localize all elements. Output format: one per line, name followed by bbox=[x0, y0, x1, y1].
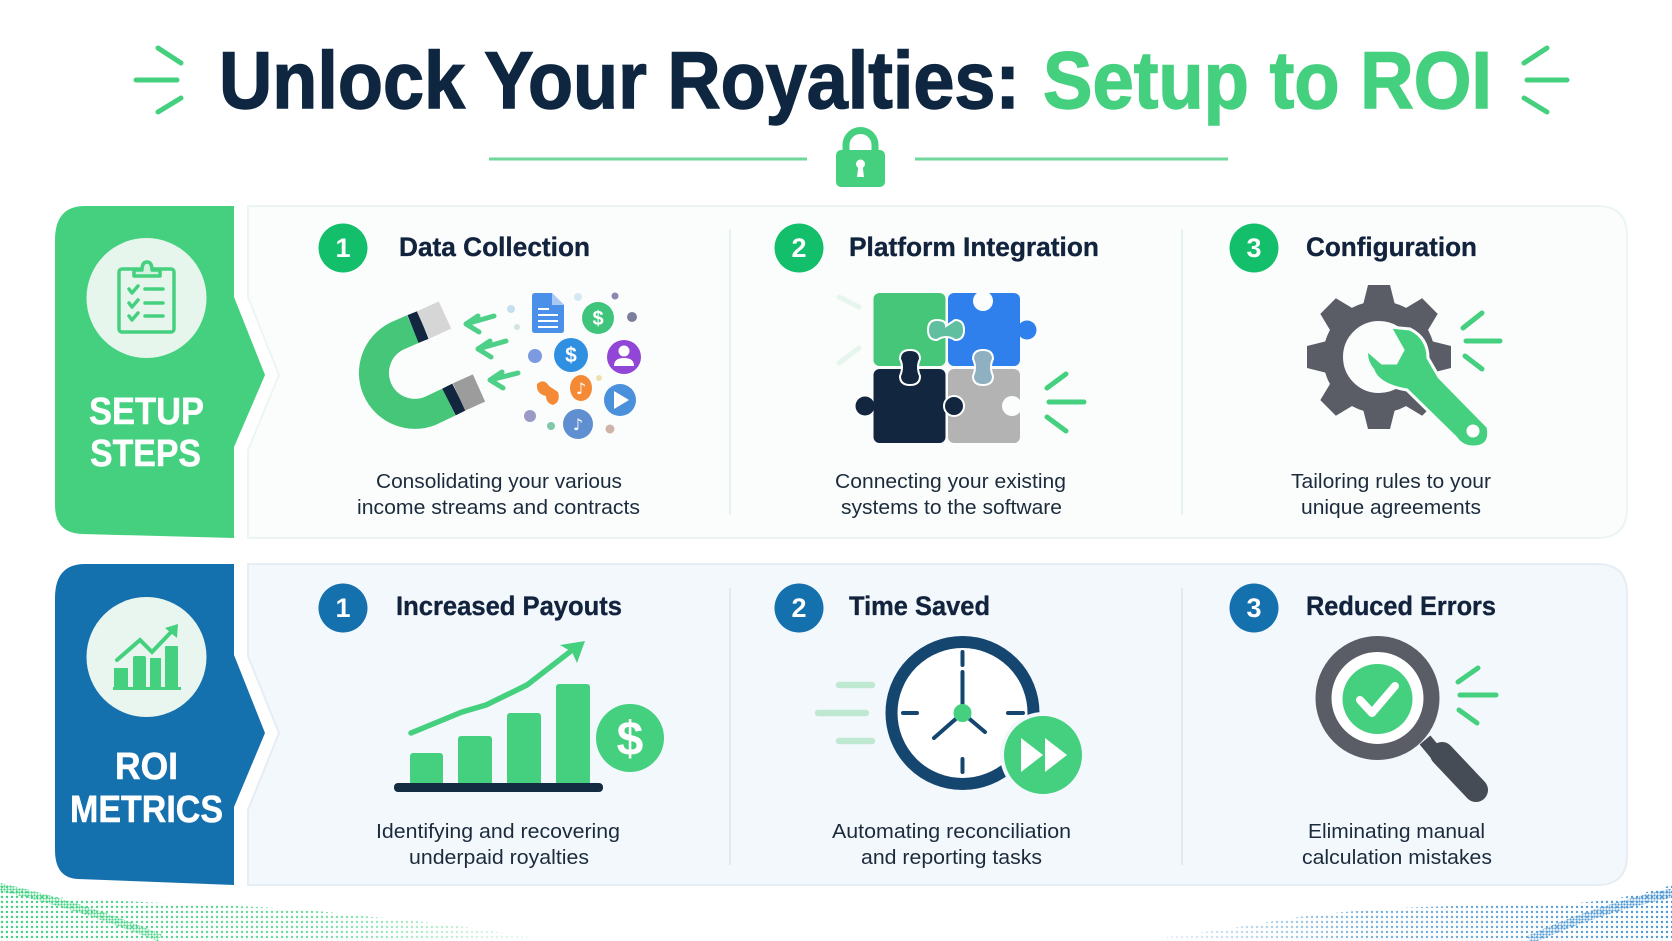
icon: puzzle pieces bbox=[839, 291, 1084, 443]
icon: padlock bbox=[836, 130, 885, 187]
step 1: data collection bbox=[318, 224, 641, 519]
number badge 1: 1 bbox=[335, 233, 351, 263]
side tab: setup steps bbox=[55, 206, 265, 538]
icon: magnifying glass with check bbox=[1324, 644, 1496, 790]
number badge 1 bbox=[318, 584, 368, 632]
heading: Data Collection bbox=[399, 232, 590, 262]
description bbox=[835, 470, 1066, 519]
description bbox=[832, 820, 1071, 869]
description: calculation mistakes bbox=[1302, 846, 1492, 869]
description: systems to the software bbox=[841, 496, 1062, 519]
title: Unlock Your Royalties: bbox=[219, 36, 1020, 126]
icon: magnet attracting income icons: $ bbox=[592, 308, 604, 330]
number badge 3: 3 bbox=[1246, 233, 1262, 263]
heading: Increased Payouts bbox=[396, 591, 622, 621]
description: Automating reconciliation bbox=[832, 820, 1071, 843]
number badge 1: 1 bbox=[335, 593, 351, 623]
title bbox=[219, 36, 1492, 126]
step 3: configuration bbox=[1230, 224, 1500, 519]
icon: right title burst bbox=[1524, 48, 1567, 112]
metric 3: reduced errors bbox=[1230, 584, 1496, 869]
heading: Configuration bbox=[1306, 232, 1477, 262]
icon: left title burst bbox=[136, 48, 181, 112]
icon: clock with fast-forward bbox=[818, 642, 1084, 796]
side tab: setup steps: SETUP bbox=[89, 391, 204, 433]
description: Tailoring rules to your bbox=[1291, 470, 1491, 493]
title: Setup to ROI bbox=[1043, 36, 1492, 126]
panel: setup steps bbox=[55, 206, 1627, 538]
bar chart with rising arrow and dollar: $ bbox=[617, 713, 644, 766]
bar chart with rising arrow and dollar bbox=[394, 641, 664, 792]
icon: magnet attracting income icons: $ bbox=[565, 344, 577, 367]
side tab: roi metrics: ROI bbox=[115, 746, 178, 788]
icon: clipboard checklist bbox=[119, 262, 174, 332]
icon: growth chart bbox=[113, 624, 181, 690]
number badge 2 bbox=[774, 584, 824, 632]
heading: Reduced Errors bbox=[1306, 591, 1496, 621]
icon: magnet attracting income icons: ♪ bbox=[573, 415, 583, 434]
side tab: roi metrics: METRICS bbox=[70, 789, 223, 831]
description bbox=[1302, 820, 1492, 869]
step 2: platform integration bbox=[774, 224, 1099, 519]
description: Consolidating your various bbox=[376, 470, 622, 493]
heading: Platform Integration bbox=[849, 232, 1099, 262]
metric 1: increased payouts bbox=[318, 584, 664, 869]
number badge 2 bbox=[774, 224, 824, 272]
description: Identifying and recovering bbox=[376, 820, 620, 843]
number badge 3 bbox=[1230, 224, 1278, 272]
metric 2: time saved bbox=[774, 584, 1084, 869]
number badge 2: 2 bbox=[791, 593, 807, 623]
icon: gear and wrench bbox=[1307, 285, 1500, 447]
number badge 1 bbox=[318, 224, 368, 272]
decorative wave: bottom left bbox=[0, 885, 549, 941]
number badge 3: 3 bbox=[1246, 593, 1262, 623]
description: Connecting your existing bbox=[835, 470, 1066, 493]
description bbox=[357, 470, 640, 519]
icon: magnet attracting income icons: ♪ bbox=[576, 379, 586, 398]
number badge 3 bbox=[1230, 584, 1278, 632]
decorative wave: bottom right bbox=[1129, 885, 1672, 941]
description: Eliminating manual bbox=[1308, 820, 1485, 843]
title divider with lock bbox=[489, 130, 1228, 187]
number badge 2: 2 bbox=[791, 233, 807, 263]
side tab: setup steps: STEPS bbox=[90, 433, 201, 475]
side tab: roi metrics bbox=[55, 564, 265, 885]
heading: Time Saved bbox=[849, 591, 990, 621]
description bbox=[376, 820, 620, 869]
description: and reporting tasks bbox=[861, 846, 1042, 869]
description bbox=[1291, 470, 1491, 519]
description: income streams and contracts bbox=[357, 496, 640, 519]
description: unique agreements bbox=[1301, 496, 1481, 519]
panel: roi metrics bbox=[55, 564, 1627, 885]
icon: magnet attracting income icons bbox=[374, 292, 641, 439]
description: underpaid royalties bbox=[409, 846, 589, 869]
